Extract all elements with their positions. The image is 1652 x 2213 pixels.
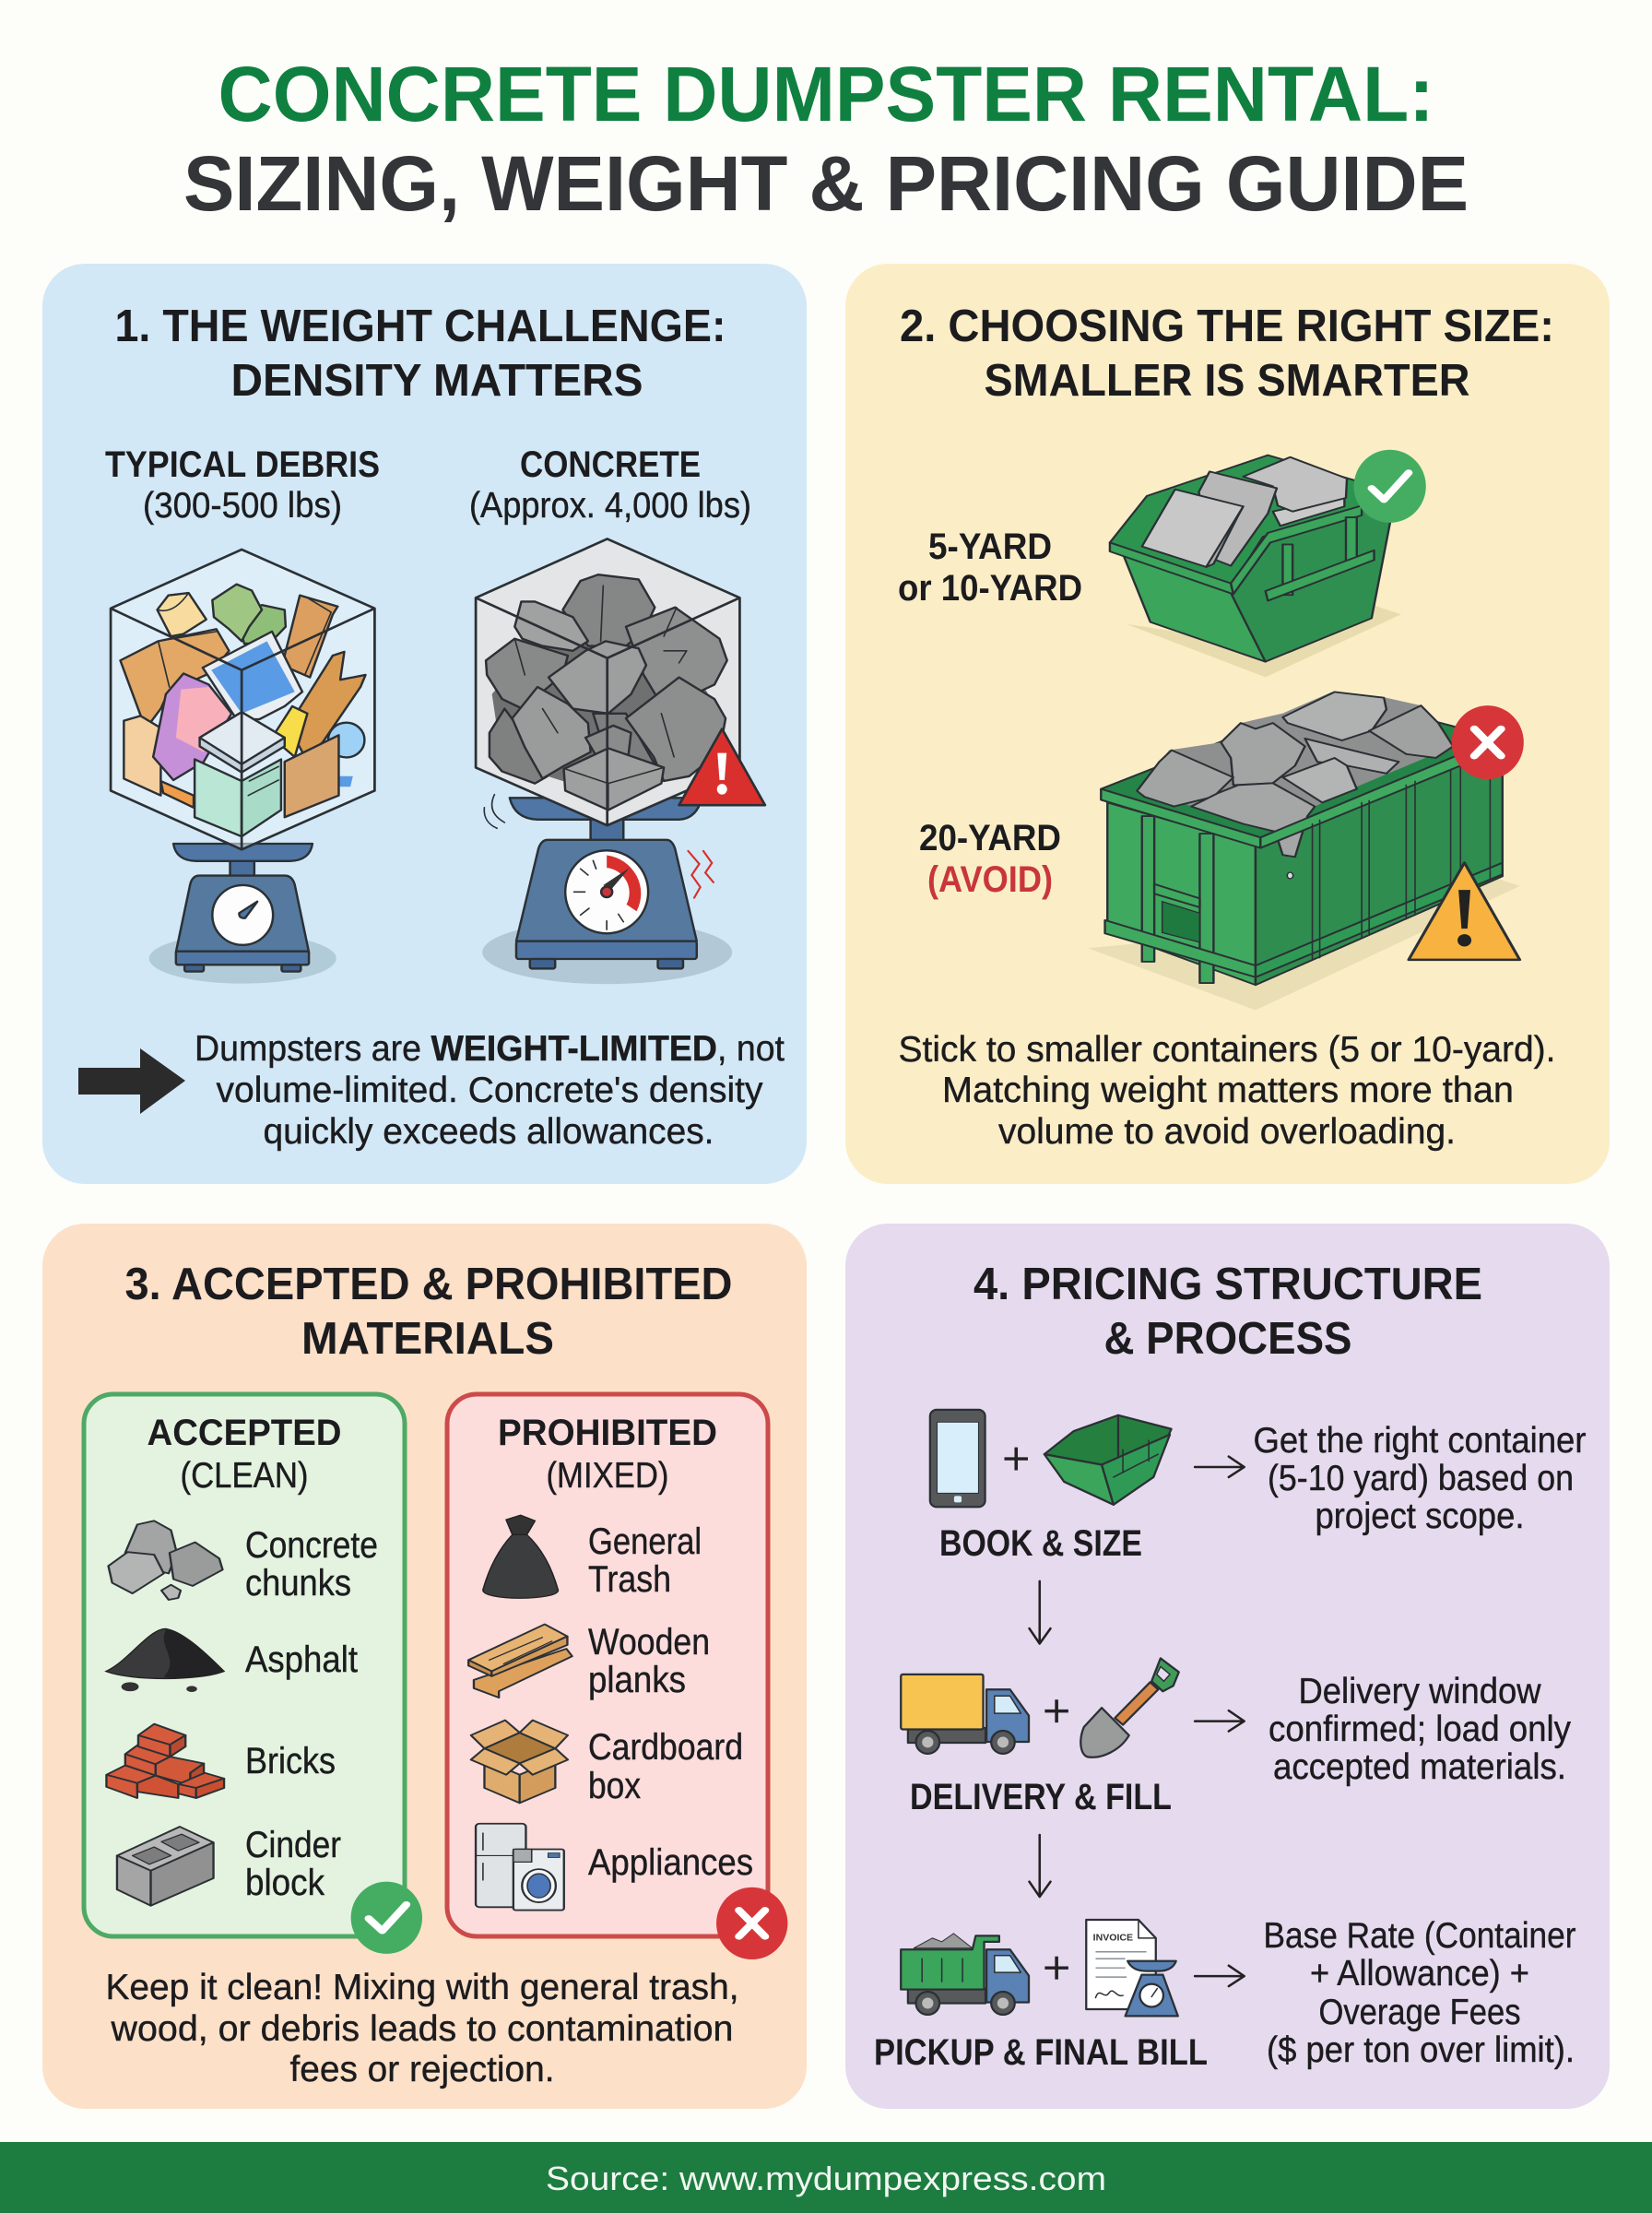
text: accepted items xyxy=(245,1525,378,1903)
label: 5 or 10 yard: or 10-YARD xyxy=(898,568,1082,609)
text: book description xyxy=(1254,1421,1587,1536)
label: accepted clean: ACCEPTED xyxy=(148,1413,341,1453)
icon: invoice with scale xyxy=(1086,1920,1178,2016)
step icons: book and size xyxy=(930,1410,1172,1507)
icons: accepted materials xyxy=(106,1521,224,1906)
heading: weight challenge: 1. THE WEIGHT CHALLENGE: xyxy=(114,302,726,351)
icon: orange warning triangle xyxy=(1409,863,1520,960)
text: delivery description: Delivery window xyxy=(1298,1672,1541,1711)
panel: accepted list xyxy=(84,1394,422,1954)
label: typical debris: (300-500 lbs) xyxy=(143,486,342,526)
text: size advice: Matching weight matters more than xyxy=(942,1071,1514,1110)
text: prohibited items xyxy=(588,1521,753,1883)
text: accepted items: block xyxy=(245,1863,325,1903)
label: typical debris: TYPICAL DEBRIS xyxy=(105,444,380,485)
heading: materials: MATERIALS xyxy=(301,1314,554,1364)
icon: dump truck xyxy=(901,1934,1029,2015)
icon: green check xyxy=(1354,450,1426,523)
icon: concrete chunks xyxy=(109,1521,222,1600)
heading: pricing: 4. PRICING STRUCTURE xyxy=(974,1260,1482,1309)
label: 5 or 10 yard xyxy=(898,527,1082,609)
heading: right size: 2. CHOOSING THE RIGHT SIZE: xyxy=(900,302,1554,351)
icon: phone xyxy=(930,1410,985,1507)
text: pricing description: Overage Fees xyxy=(1318,1993,1521,2032)
text: weight limited xyxy=(195,1029,785,1152)
arrow: down to pickup xyxy=(1030,1835,1050,1897)
text: keep it clean xyxy=(105,1968,739,2089)
label: book and size: BOOK & SIZE xyxy=(939,1523,1142,1564)
text: accepted items: Cinder xyxy=(245,1825,341,1865)
panel: right size xyxy=(845,264,1610,1184)
text: prohibited items: Cardboard xyxy=(588,1727,743,1768)
heading: pricing xyxy=(974,1260,1482,1364)
heading: weight challenge xyxy=(114,302,726,406)
icon: mini dumpster xyxy=(1044,1415,1172,1505)
icon: cinder block xyxy=(117,1827,214,1906)
label: prohibited mixed xyxy=(498,1413,717,1496)
icon: plus xyxy=(1044,1699,1068,1722)
label: prohibited mixed: PROHIBITED xyxy=(498,1413,717,1453)
text: weight limited: volume-limited. Concrete's density xyxy=(216,1071,763,1110)
text: prohibited items: planks xyxy=(588,1660,686,1700)
text: delivery description xyxy=(1268,1672,1571,1787)
illustration: typical debris cube on scale xyxy=(111,550,374,984)
text: keep it clean: wood, or debris leads to contamination xyxy=(110,2009,734,2049)
icon: red x xyxy=(1452,705,1524,779)
text: keep it clean: Keep it clean! Mixing with general trash, xyxy=(105,1968,739,2007)
text: size advice: Stick to smaller containers (5 or 10-yard). xyxy=(898,1030,1556,1070)
text: pricing description: Base Rate (Container xyxy=(1263,1916,1576,1956)
text: prohibited items: General xyxy=(588,1521,702,1562)
footer: source: Source: www.mydumpexpress.com xyxy=(546,2160,1106,2197)
arrow: book to text xyxy=(1195,1457,1245,1477)
label: concrete: (Approx. 4,000 lbs) xyxy=(469,486,751,526)
icon: red x badge xyxy=(716,1888,787,1959)
heading: pricing: & PROCESS xyxy=(1104,1314,1351,1364)
text: delivery description: accepted materials. xyxy=(1273,1747,1566,1787)
heading: right size: SMALLER IS SMARTER xyxy=(985,356,1469,406)
step icons: pickup and final bill xyxy=(901,1920,1178,2016)
icon: asphalt xyxy=(106,1628,224,1692)
text: book description: project scope. xyxy=(1315,1497,1525,1536)
label: concrete: CONCRETE xyxy=(520,444,701,485)
illustration: concrete cube on scale xyxy=(476,538,765,984)
text: book description: (5-10 yard) based on xyxy=(1268,1459,1574,1498)
label: delivery and fill: DELIVERY & FILL xyxy=(910,1777,1172,1817)
text: accepted items: Concrete xyxy=(245,1525,378,1566)
heading: materials xyxy=(125,1260,732,1364)
text: prohibited items: Wooden xyxy=(588,1622,710,1663)
illustration: small dumpster with check xyxy=(1110,450,1426,677)
illustration: large dumpster with warning xyxy=(1088,692,1524,1011)
text: prohibited items: Appliances xyxy=(588,1842,753,1883)
panel: pricing structure and process xyxy=(845,1224,1610,2109)
text: pricing description: ($ per ton over limit). xyxy=(1267,2030,1575,2070)
label: accepted clean xyxy=(148,1413,341,1496)
text: accepted items: Bricks xyxy=(245,1741,336,1781)
text: pricing description: + Allowance) + xyxy=(1310,1954,1529,1994)
text: prohibited items: box xyxy=(588,1766,641,1806)
label: pickup and final bill: PICKUP & FINAL BILL xyxy=(874,2032,1208,2073)
heading: weight challenge: DENSITY MATTERS xyxy=(230,356,643,406)
icon: appliances xyxy=(476,1824,564,1911)
text: weight limited: quickly exceeds allowances. xyxy=(264,1112,714,1152)
text: prohibited items: Trash xyxy=(588,1559,671,1600)
text: delivery description: confirmed; load only xyxy=(1268,1710,1571,1749)
icon: shovel xyxy=(1080,1658,1179,1757)
text: keep it clean: fees or rejection. xyxy=(289,2050,555,2089)
icons: prohibited materials xyxy=(468,1515,572,1911)
label: 20 yard avoid: 20-YARD xyxy=(919,818,1061,858)
heading: materials: 3. ACCEPTED & PROHIBITED xyxy=(125,1260,732,1309)
panel: accepted and prohibited materials xyxy=(42,1224,807,2109)
arrow: black right arrow xyxy=(78,1048,185,1114)
title: SIZING, WEIGHT & PRICING GUIDE xyxy=(183,140,1469,227)
text: weight limited: Dumpsters are WEIGHT-LIMITED, not xyxy=(195,1029,785,1069)
icon: green check badge xyxy=(351,1882,422,1954)
label: prohibited mixed: (MIXED) xyxy=(546,1456,669,1496)
icon: delivery truck xyxy=(901,1675,1029,1754)
label: typical debris xyxy=(105,444,380,526)
icon: plus xyxy=(1004,1448,1028,1471)
icon: plus xyxy=(1044,1957,1068,1980)
title xyxy=(183,51,1469,227)
text: pricing description xyxy=(1263,1916,1576,2070)
panel: prohibited list xyxy=(447,1394,787,1959)
icon: bricks xyxy=(106,1724,224,1798)
text: size advice xyxy=(898,1030,1556,1152)
icon: invoice with scale: INVOICE xyxy=(1093,1932,1133,1943)
footer: source xyxy=(0,2142,1652,2213)
label: 20 yard avoid: (AVOID) xyxy=(927,859,1053,900)
step icons: delivery and fill xyxy=(901,1658,1179,1757)
text: accepted items: Asphalt xyxy=(245,1639,358,1680)
icon: red warning triangle xyxy=(679,729,765,805)
icon: wooden planks xyxy=(468,1625,572,1698)
arrow: down to delivery xyxy=(1030,1581,1050,1644)
icon: cardboard box xyxy=(471,1721,568,1803)
label: 5 or 10 yard: 5-YARD xyxy=(928,527,1052,567)
arrow: delivery to text xyxy=(1195,1710,1245,1732)
heading: right size xyxy=(900,302,1554,406)
text: book description: Get the right container xyxy=(1254,1421,1587,1461)
arrow: pickup to text xyxy=(1195,1966,1245,1986)
text: accepted items: chunks xyxy=(245,1563,351,1604)
title: CONCRETE DUMPSTER RENTAL: xyxy=(218,51,1434,137)
icon: trash bag xyxy=(483,1515,558,1598)
label: 20 yard avoid xyxy=(919,818,1061,900)
label: accepted clean: (CLEAN) xyxy=(181,1456,308,1496)
text: size advice: volume to avoid overloading. xyxy=(998,1112,1456,1152)
label: concrete xyxy=(469,444,751,526)
panel: weight challenge xyxy=(42,264,807,1184)
